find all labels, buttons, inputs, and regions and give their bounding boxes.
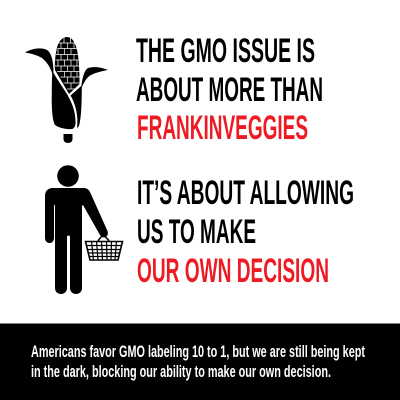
heading line 2: US TO MAKE xyxy=(137,213,256,251)
corn left leaf xyxy=(25,48,54,76)
corn right leaf xyxy=(81,67,108,90)
basket mesh xyxy=(86,241,122,260)
heading: own decision xyxy=(137,174,354,290)
basket outline xyxy=(86,242,122,260)
person head xyxy=(57,165,79,187)
corn kernel grid xyxy=(55,38,80,89)
footer panel xyxy=(0,324,400,400)
heading: GMO issue xyxy=(136,32,323,147)
corn cob xyxy=(55,37,80,94)
corn husk left xyxy=(52,71,76,129)
corn stem xyxy=(64,134,72,143)
shopping basket xyxy=(86,236,122,260)
person body xyxy=(45,188,108,294)
basket handle xyxy=(98,236,109,241)
icon: corn xyxy=(25,37,108,143)
footer background xyxy=(0,324,400,400)
icon: person with basket xyxy=(45,165,122,294)
corn husk right xyxy=(70,86,82,128)
